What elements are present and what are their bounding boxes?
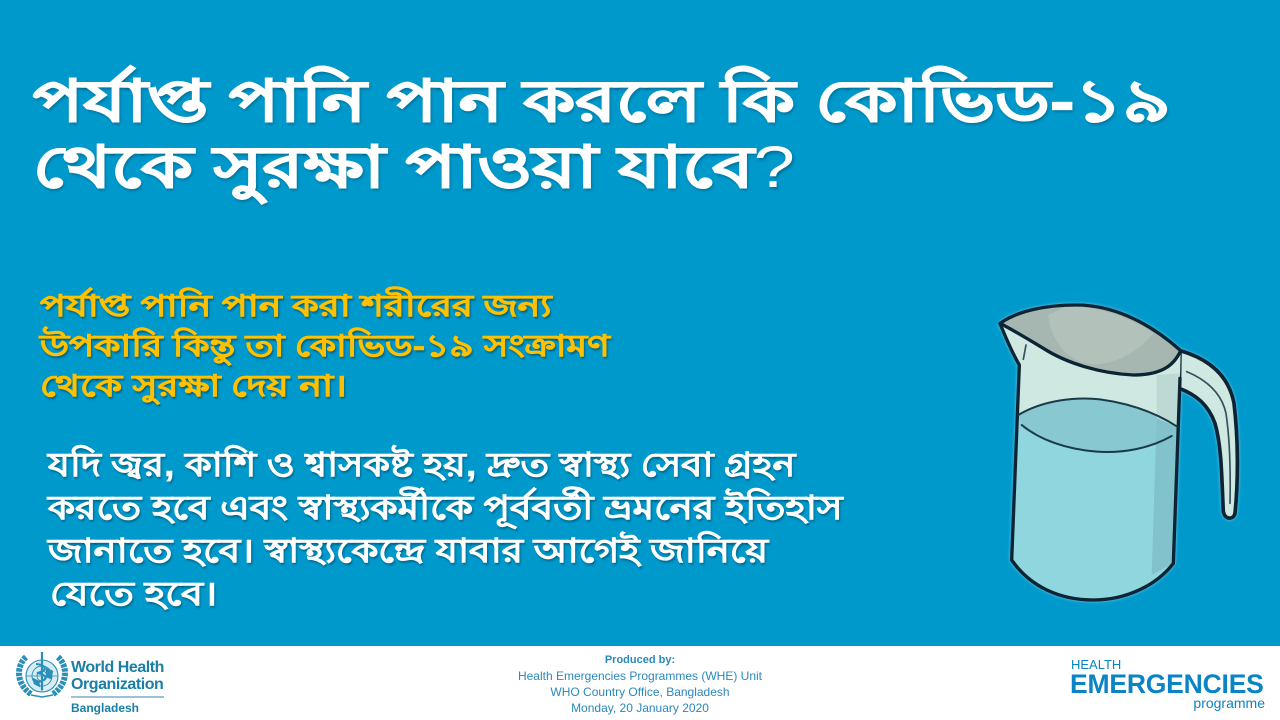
text block: yellow key message: উপকারি কিন্তু তা কোভিড-১৯ সংক্রামণ (40, 330, 610, 363)
title (32, 64, 1171, 208)
Health Emergencies programme logo: EMERGENCIES (1070, 669, 1264, 699)
text block: yellow key message (38, 286, 614, 408)
WHO logo (16, 652, 164, 715)
Health Emergencies programme logo (1070, 657, 1265, 711)
producer credits (518, 654, 762, 715)
producer credits: Produced by: (605, 654, 675, 666)
icon: WHO emblem (16, 652, 68, 698)
text block: yellow key message: থেকে সুরক্ষা দেয় না। (40, 370, 347, 403)
logo country: Bangladesh (71, 701, 139, 715)
producer credits: Health Emergencies Programmes (WHE) Unit (518, 669, 762, 683)
text block: yellow key message: পর্যাপ্ত পানি পান করা শরীরের জন্য (40, 290, 551, 323)
text block: white advice: যেতে হবে। (50, 575, 217, 612)
title: থেকে সুরক্ষা পাওয়া যাবে? (33, 135, 795, 200)
producer credits: Monday, 20 January 2020 (571, 701, 709, 715)
title: পর্যাপ্ত পানি পান করলে কি কোভিড-১৯ (33, 69, 1171, 134)
Health Emergencies programme logo: HEALTH (1071, 657, 1121, 672)
text block: white advice (46, 444, 846, 612)
text block: white advice: যদি জ্বর, কাশি ও শ্বাসকষ্ট হয়, দ্রুত স্বাস্থ্য সেবা গ্রহন (48, 446, 795, 483)
Health Emergencies programme logo: programme (1193, 695, 1265, 711)
text block: white advice: করতে হবে এবং স্বাস্থ্যকর্মীকে পূর্ববর্তী ভ্রমনের ইতিহাস (48, 489, 843, 526)
logo wordmark: World Health (71, 659, 164, 676)
logo wordmark: Organization (71, 676, 163, 693)
logo wordmark (71, 659, 164, 693)
footer band (0, 646, 1280, 720)
producer credits: WHO Country Office, Bangladesh (550, 685, 730, 699)
icon: water jug (996, 301, 1242, 604)
text block: white advice: জানাতে হবে। স্বাস্থ্যকেন্দ্রে যাবার আগেই জানিয়ে (48, 532, 768, 569)
